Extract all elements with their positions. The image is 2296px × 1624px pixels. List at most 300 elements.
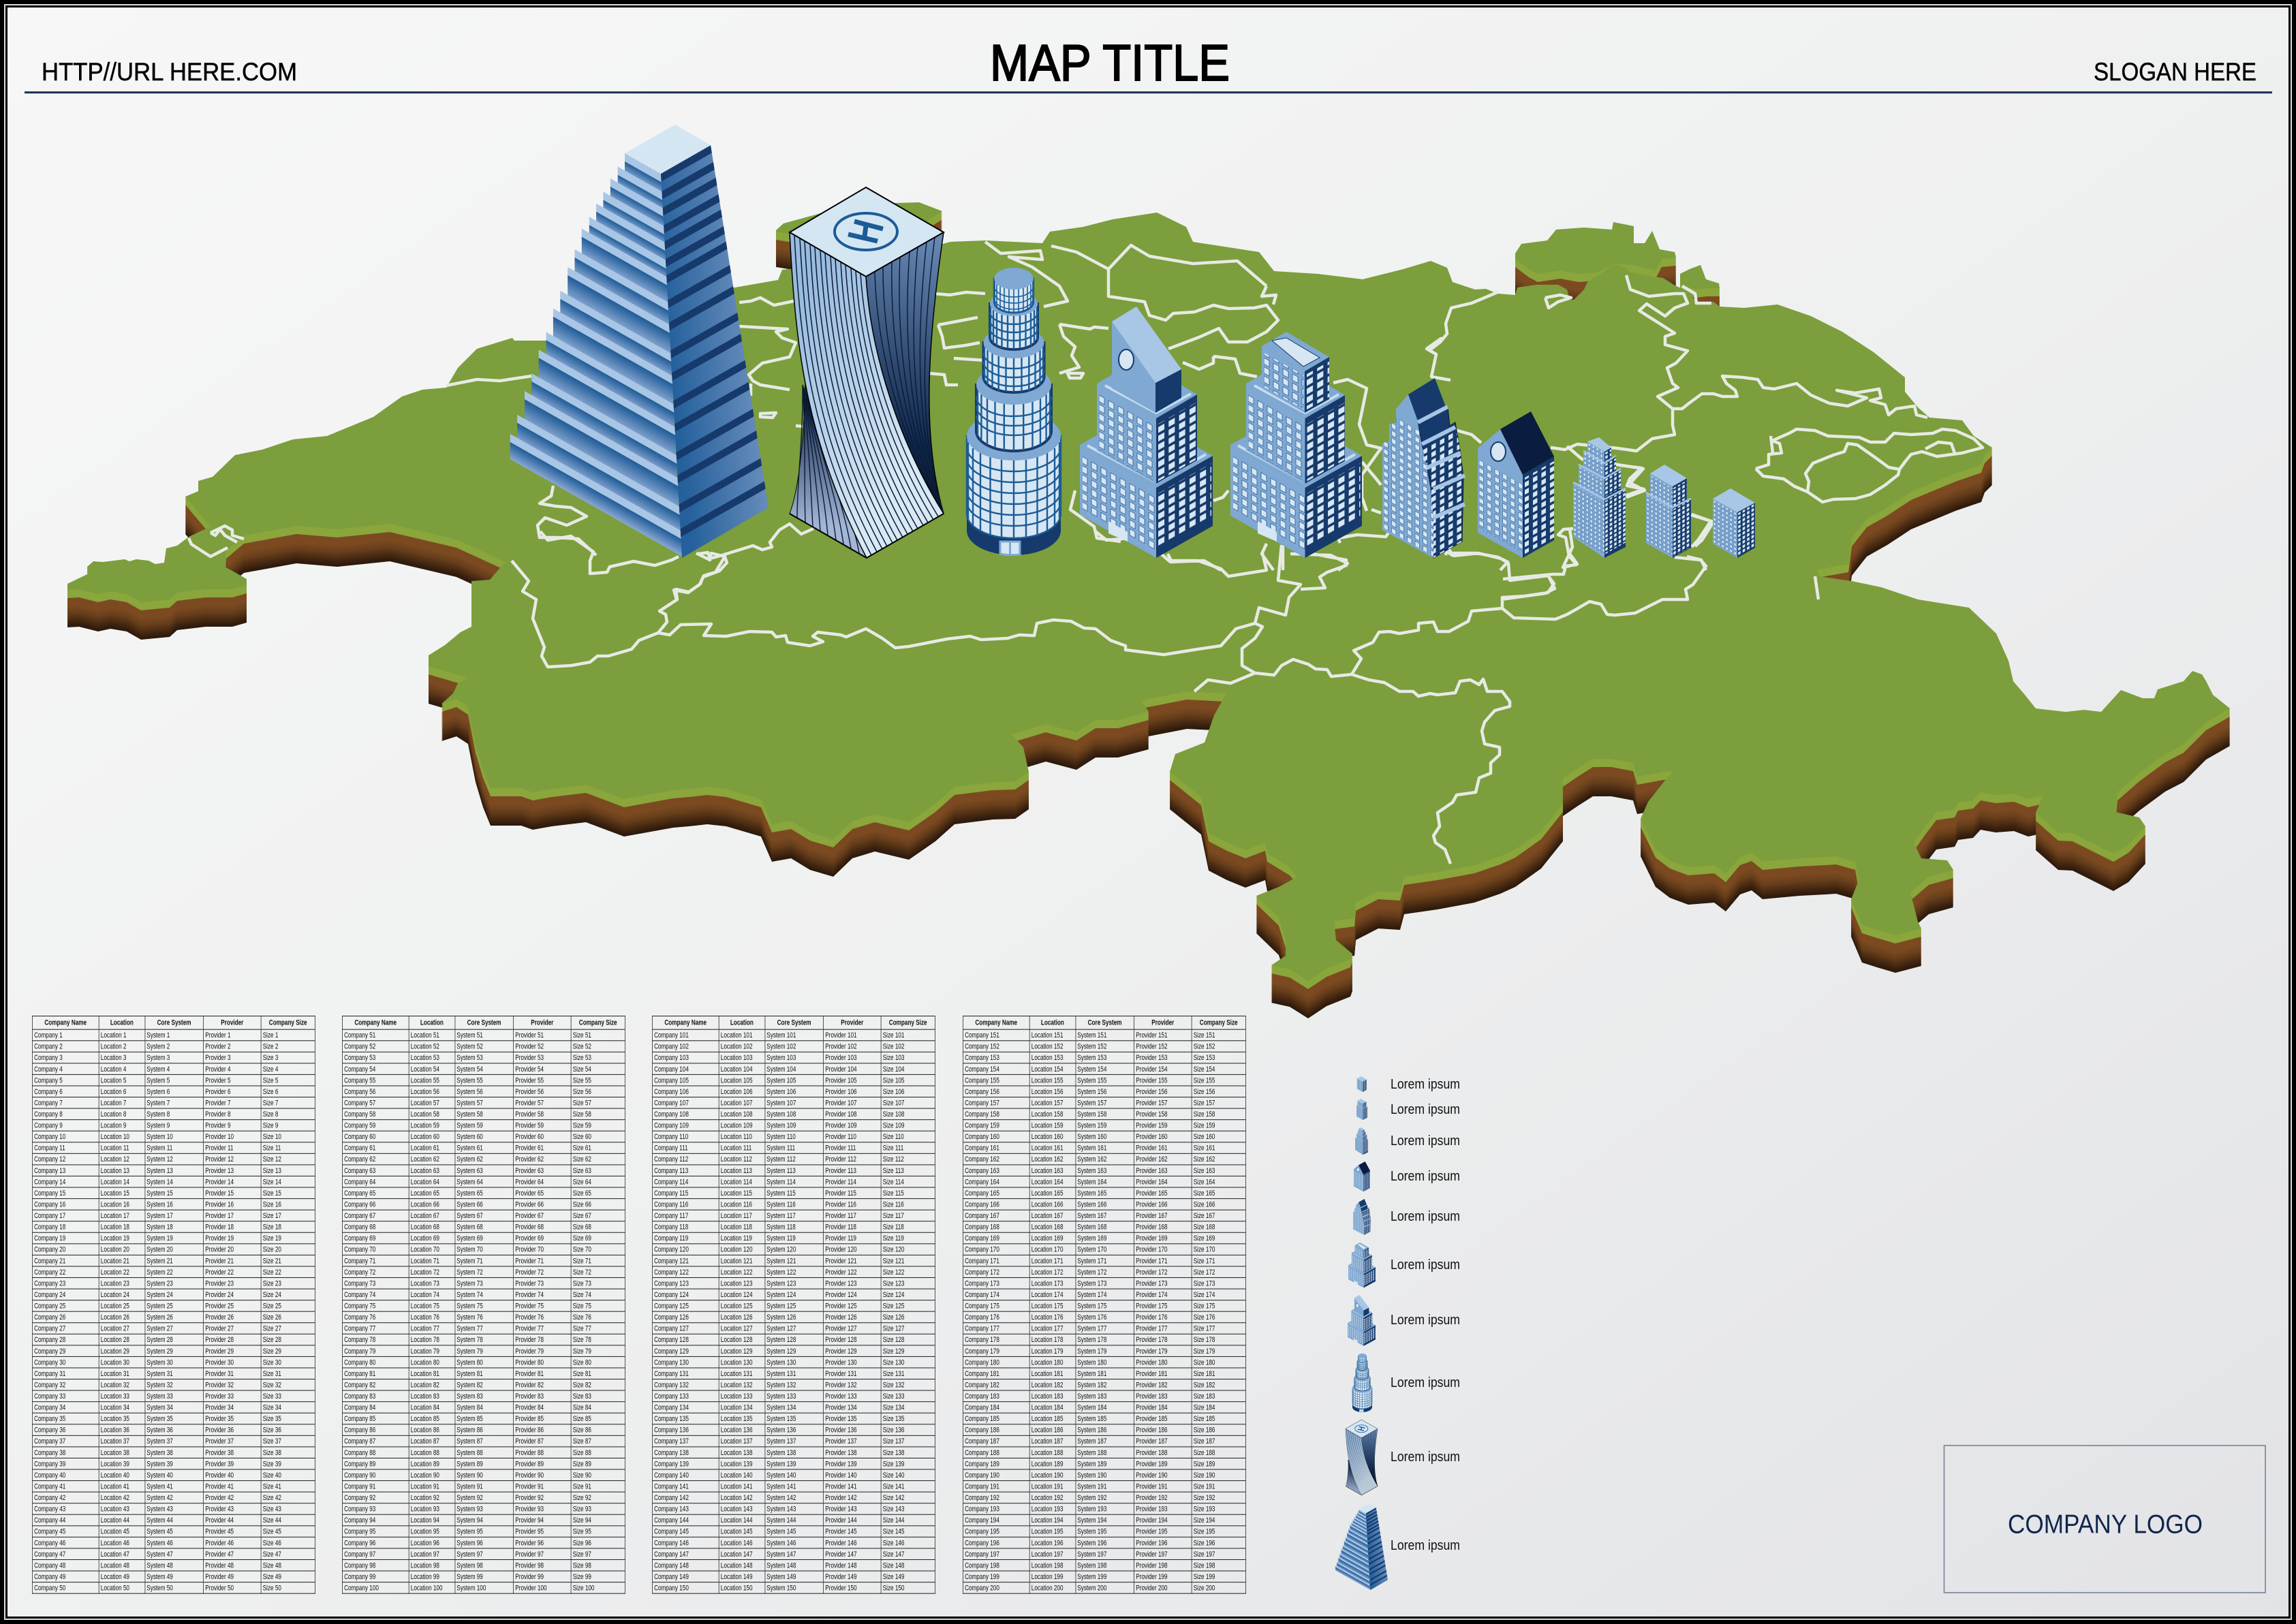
table 3: companies 101-150: Size 104 [883,1065,904,1073]
table 1: companies 1-50: Location 46 [100,1538,129,1547]
table 3: companies 101-150: Provider 140 [825,1471,857,1479]
table 3: companies 101-150: Location 142 [721,1493,753,1501]
region borders [189,242,1983,864]
table 2: companies 51-100: Size 94 [573,1516,591,1524]
table 4: companies 151-200: System 163 [1077,1166,1106,1174]
table 1: companies 1-50: Company 11 [34,1144,65,1152]
table 3: companies 101-150: System 134 [766,1403,796,1411]
table 3: companies 101-150: Provider 111 [825,1144,856,1152]
table 1: companies 1-50: System 7 [146,1098,170,1107]
table 1: companies 1-50: Size 41 [262,1482,281,1490]
table 3: companies 101-150: Size 124 [883,1290,904,1298]
table 4: companies 151-200: Provider 185 [1136,1414,1168,1422]
table 3: companies 101-150: System 107 [766,1098,796,1107]
table 1: companies 1-50: Size 33 [262,1392,281,1400]
table 2: companies 51-100 [342,1016,625,1594]
table 3: companies 101-150: Location 137 [721,1437,753,1446]
table 3: companies 101-150: Provider 145 [825,1527,857,1535]
table 2: companies 51-100: Provider 73 [515,1279,544,1287]
table 1: companies 1-50: Size 29 [262,1347,281,1355]
table 1: companies 1-50: Location 37 [100,1437,129,1446]
table 1: companies 1-50: Provider 27 [205,1324,234,1332]
table 4: companies 151-200: System 173 [1077,1279,1106,1287]
table 2: companies 51-100: Company 88 [344,1448,375,1456]
table 4: companies 151-200: System 157 [1077,1098,1106,1107]
table 2: companies 51-100: System 78 [456,1335,483,1343]
table 4: companies 151-200: Provider 165 [1136,1189,1168,1197]
table 1: companies 1-50: Company 18 [34,1222,65,1231]
table 2: companies 51-100: Size 83 [573,1392,591,1400]
table 1: companies 1-50: System 30 [146,1358,172,1367]
table 4: companies 151-200: Company 172 [965,1268,999,1276]
table 4: companies 151-200: Company 196 [965,1538,999,1547]
table 3: companies 101-150: Company 130 [654,1358,689,1367]
table 3: companies 101-150: Provider 105 [825,1076,857,1084]
table 3: companies 101-150: Provider 139 [825,1459,857,1468]
table 1: companies 1-50: System 37 [146,1437,172,1446]
table 4: companies 151-200: Location 189 [1031,1459,1064,1468]
table 1: companies 1-50: Location 43 [100,1504,129,1513]
table 3: companies 101-150: Provider [841,1018,863,1027]
table 1: companies 1-50: Location 30 [100,1358,129,1367]
table 1: companies 1-50: Size 32 [262,1380,281,1389]
table 2: companies 51-100: System 58 [456,1110,483,1118]
table 3: companies 101-150: Company 128 [654,1335,689,1343]
table 1: companies 1-50: Company 22 [34,1268,65,1276]
table 2: companies 51-100: Size 64 [573,1177,591,1186]
table 4: companies 151-200: Size 191 [1194,1482,1215,1490]
table 3: companies 101-150: Company 121 [654,1256,689,1265]
table 1: companies 1-50: Size 9 [262,1121,278,1129]
table 1: companies 1-50: Provider 6 [205,1087,230,1095]
table 2: companies 51-100: Provider 68 [515,1222,544,1231]
table 4: companies 151-200: Company 194 [965,1516,999,1524]
table 2: companies 51-100: System 54 [456,1065,483,1073]
table 1: companies 1-50: System 25 [146,1301,172,1310]
table 3: companies 101-150: System 102 [766,1042,796,1050]
table 2: companies 51-100: Size 79 [573,1347,591,1355]
table 3: companies 101-150: Provider 117 [825,1211,856,1219]
table 4: companies 151-200: Company 159 [965,1121,999,1129]
table 2: companies 51-100: Provider 55 [515,1076,544,1084]
legend item 9 [1346,1420,1460,1495]
table 3: companies 101-150: Company 132 [654,1380,689,1389]
table 1: companies 1-50: Company 24 [34,1290,65,1298]
table 2: companies 51-100: Size 77 [573,1324,591,1332]
table 2: companies 51-100: System 51 [456,1031,483,1039]
table 4: companies 151-200: Provider 174 [1136,1290,1168,1298]
table 2: companies 51-100: Size 75 [573,1301,591,1310]
table 2: companies 51-100: System 61 [456,1144,483,1152]
table 2: companies 51-100: Company 72 [344,1268,375,1276]
table 2: companies 51-100: System 67 [456,1211,483,1219]
helipad [835,213,897,250]
table 1: companies 1-50: Company 30 [34,1358,65,1367]
table 2: companies 51-100: Location 61 [411,1144,439,1152]
table 2: companies 51-100: System 74 [456,1290,483,1298]
table 2: companies 51-100: System 85 [456,1414,483,1422]
table 1: companies 1-50: Company 36 [34,1426,65,1434]
table 2: companies 51-100: Company 93 [344,1504,375,1513]
table 1: companies 1-50: Location 31 [100,1369,129,1377]
table 1: companies 1-50: Provider 42 [205,1493,234,1501]
table 2: companies 51-100: Company 63 [344,1166,375,1174]
table 3: companies 101-150: Provider 130 [825,1358,857,1367]
table 2: companies 51-100: System 68 [456,1222,483,1231]
table 3: companies 101-150: Provider 142 [825,1493,857,1501]
table 4: companies 151-200: Company 178 [965,1335,999,1343]
table 4: companies 151-200: Size 154 [1194,1065,1215,1073]
table 4: companies 151-200: Location 179 [1031,1347,1064,1355]
table 1: companies 1-50: Company 27 [34,1324,65,1332]
table 1: companies 1-50: System 47 [146,1550,172,1558]
table 4: companies 151-200: Size 152 [1194,1042,1215,1050]
table 1: companies 1-50: Size 21 [262,1256,281,1265]
table 3: companies 101-150: Size 138 [883,1448,904,1456]
table 4: companies 151-200: Company Name [975,1018,1017,1027]
table 3: companies 101-150: System 104 [766,1065,796,1073]
table 3: companies 101-150: Provider 106 [825,1087,857,1095]
table 4: companies 151-200: Provider 181 [1136,1369,1168,1377]
table 3: companies 101-150: Company 134 [654,1403,689,1411]
table 4: companies 151-200: Size 195 [1194,1527,1215,1535]
table 2: companies 51-100: Provider [531,1018,553,1027]
table 2: companies 51-100: Provider 87 [515,1437,544,1446]
table 3: companies 101-150: Size 106 [883,1087,904,1095]
legend item 1: Lorem ipsum [1391,1077,1460,1092]
table 1: companies 1-50: Provider 11 [205,1144,233,1152]
table 1: companies 1-50: Location 11 [100,1144,129,1152]
table 2: companies 51-100: Size 55 [573,1076,591,1084]
table 3: companies 101-150: Size 130 [883,1358,904,1367]
table 3: companies 101-150: Location 149 [721,1572,753,1580]
table 3: companies 101-150: Location 129 [721,1347,753,1355]
table 2: companies 51-100: Location 88 [411,1448,439,1456]
table 3: companies 101-150: System 119 [766,1234,796,1242]
table 3: companies 101-150: Size 101 [883,1031,904,1039]
table 1: companies 1-50: Provider 34 [205,1403,234,1411]
table 4: companies 151-200: Company 179 [965,1347,999,1355]
table 4: companies 151-200: Location 194 [1031,1516,1064,1524]
table 1: companies 1-50: Location 13 [100,1166,129,1174]
table 4: companies 151-200: Provider 186 [1136,1426,1168,1434]
table 4: companies 151-200: Location 200 [1031,1583,1064,1592]
table 4: companies 151-200: Location 199 [1031,1572,1064,1580]
table 2: companies 51-100: System 73 [456,1279,483,1287]
table 4: companies 151-200: Location 176 [1031,1313,1064,1321]
table 4: companies 151-200: Location 185 [1031,1414,1064,1422]
table 3: companies 101-150: Location 122 [721,1268,753,1276]
table 4: companies 151-200: Provider 170 [1136,1245,1168,1253]
table 3: companies 101-150: System 122 [766,1268,796,1276]
table 2: companies 51-100: Company 84 [344,1403,375,1411]
table 2: companies 51-100: Company 78 [344,1335,375,1343]
table 2: companies 51-100: Location 81 [411,1369,439,1377]
table 4: companies 151-200: Size 161 [1194,1144,1215,1152]
table 2: companies 51-100: System 71 [456,1256,483,1265]
table 1: companies 1-50: Size 48 [262,1561,281,1570]
table 4: companies 151-200: Size 164 [1194,1177,1215,1186]
table 3: companies 101-150: Size 118 [883,1222,904,1231]
table 4: companies 151-200: System 182 [1077,1380,1106,1389]
table 2: companies 51-100: Company 92 [344,1493,375,1501]
table 2: companies 51-100: Location 59 [411,1121,439,1129]
table 4: companies 151-200: Size 177 [1194,1324,1215,1332]
table 4: companies 151-200: System 159 [1077,1121,1106,1129]
table 1: companies 1-50: Location 12 [100,1155,129,1164]
table 2: companies 51-100: Company 73 [344,1279,375,1287]
table 4: companies 151-200: Location 182 [1031,1380,1064,1389]
legend item 3: Lorem ipsum [1391,1134,1460,1149]
table 2: companies 51-100: System 83 [456,1392,483,1400]
table 2: companies 51-100: Size 100 [573,1583,594,1592]
table 3: companies 101-150: Company 145 [654,1527,689,1535]
table 4: companies 151-200: System 167 [1077,1211,1106,1219]
table 1: companies 1-50: Location 26 [100,1313,129,1321]
legend item 10 [1335,1499,1460,1590]
table 2: companies 51-100: Size 76 [573,1313,591,1321]
table 1: companies 1-50: System 44 [146,1516,172,1524]
table 2: companies 51-100: Location 58 [411,1110,439,1118]
table 2: companies 51-100: Location 89 [411,1459,439,1468]
table 1: companies 1-50: Size 34 [262,1403,281,1411]
table 2: companies 51-100: Provider 53 [515,1053,544,1061]
table 1: companies 1-50: System 17 [146,1211,172,1219]
table 4: companies 151-200: Size 155 [1194,1076,1215,1084]
table 2: companies 51-100: Company 61 [344,1144,375,1152]
table 3: companies 101-150: Size 145 [883,1527,904,1535]
table 3: companies 101-150: System 110 [766,1132,796,1140]
table 1: companies 1-50: Provider 3 [205,1053,230,1061]
table 3: companies 101-150: System 117 [766,1211,796,1219]
table 2: companies 51-100: System 57 [456,1098,483,1107]
table 1: companies 1-50: System 42 [146,1493,172,1501]
table 1: companies 1-50: Company 3 [34,1053,62,1061]
table 4: companies 151-200: Location 192 [1031,1493,1064,1501]
table 4: companies 151-200: Location 157 [1031,1098,1064,1107]
table 1: companies 1-50: Size 36 [262,1426,281,1434]
legend [1335,1076,1460,1590]
legend item 6 [1348,1243,1460,1287]
table 3: companies 101-150: Company 129 [654,1347,689,1355]
table 1: companies 1-50: Location 38 [100,1448,129,1456]
table 3: companies 101-150: Provider 123 [825,1279,857,1287]
table 1: companies 1-50: Company 38 [34,1448,65,1456]
table 4: companies 151-200: Company 155 [965,1076,999,1084]
table 2: companies 51-100: Company 94 [344,1516,375,1524]
table 4: companies 151-200: Size 188 [1194,1448,1215,1456]
table 3: companies 101-150: System 136 [766,1426,796,1434]
table 3: companies 101-150: Location 106 [721,1087,753,1095]
table 4: companies 151-200: Company 193 [965,1504,999,1513]
table 2: companies 51-100: System 82 [456,1380,483,1389]
table 3: companies 101-150: Company 111 [654,1144,688,1152]
table 3: companies 101-150 [652,1016,935,1594]
table 1: companies 1-50: Provider 45 [205,1527,234,1535]
table 1: companies 1-50: Company 26 [34,1313,65,1321]
table 4: companies 151-200: System 197 [1077,1550,1106,1558]
table 1: companies 1-50: Location 34 [100,1403,129,1411]
table 3: companies 101-150: Provider 109 [825,1121,857,1129]
table 2: companies 51-100: Provider 80 [515,1358,544,1367]
table 2: companies 51-100: Location 93 [411,1504,439,1513]
table 4: companies 151-200: System 154 [1077,1065,1106,1073]
building 2: twisted tower with helipad [790,187,944,558]
table 1: companies 1-50: Size 20 [262,1245,281,1253]
table 2: companies 51-100: Company 82 [344,1380,375,1389]
table 4: companies 151-200: Provider 169 [1136,1234,1168,1242]
table 4: companies 151-200: System 169 [1077,1234,1106,1242]
table 1: companies 1-50: Provider 12 [205,1155,234,1164]
table 4: companies 151-200: Company 169 [965,1234,999,1242]
table 4: companies 151-200: Location 166 [1031,1200,1064,1208]
table 3: companies 101-150: Size 112 [883,1155,904,1164]
table 3: companies 101-150: Company 135 [654,1414,689,1422]
table 1: companies 1-50: Size 10 [262,1132,281,1140]
table 1: companies 1-50: Location 39 [100,1459,129,1468]
table 3: companies 101-150: Location 130 [721,1358,753,1367]
table 4: companies 151-200: Core System [1088,1018,1122,1027]
table 4: companies 151-200: Location 197 [1031,1550,1064,1558]
table 3: companies 101-150: Company 140 [654,1471,689,1479]
table 4: companies 151-200: Size 185 [1194,1414,1215,1422]
table 2: companies 51-100: System 56 [456,1087,483,1095]
table 4: companies 151-200: Location 173 [1031,1279,1064,1287]
table 2: companies 51-100: Company 67 [344,1211,375,1219]
table 1: companies 1-50: Company 37 [34,1437,65,1446]
table 3: companies 101-150: System 123 [766,1279,796,1287]
table 1: companies 1-50: Location 49 [100,1572,129,1580]
table 1: companies 1-50: Provider 20 [205,1245,234,1253]
table 4: companies 151-200: System 196 [1077,1538,1106,1547]
table 1: companies 1-50: Size 19 [262,1234,281,1242]
table 1: companies 1-50: Provider 48 [205,1561,234,1570]
table 1: companies 1-50: System 22 [146,1268,172,1276]
table 3: companies 101-150: Location 101 [721,1031,753,1039]
table 1: companies 1-50: Size 23 [262,1279,281,1287]
table 1: companies 1-50: Size 12 [262,1155,281,1164]
table 2: companies 51-100: Company 54 [344,1065,375,1073]
table 1: companies 1-50: Location 44 [100,1516,129,1524]
table 2: companies 51-100: Provider 98 [515,1561,544,1570]
table 3: companies 101-150: Provider 141 [825,1482,857,1490]
table 2: companies 51-100: Company 99 [344,1572,375,1580]
table 3: companies 101-150: Size 109 [883,1121,904,1129]
table 3: companies 101-150: Size 134 [883,1403,904,1411]
table 2: companies 51-100: Size 93 [573,1504,591,1513]
table 2: companies 51-100: System 62 [456,1155,483,1164]
table 3: companies 101-150: Location 147 [721,1550,753,1558]
table 4: companies 151-200: Location 155 [1031,1076,1064,1084]
table 1: companies 1-50: System 45 [146,1527,172,1535]
table 1: companies 1-50: Provider 35 [205,1414,234,1422]
table 3: companies 101-150: Size 132 [883,1380,904,1389]
table 1: companies 1-50: Size 18 [262,1222,281,1231]
table 1: companies 1-50: Location 23 [100,1279,129,1287]
table 1: companies 1-50: System 20 [146,1245,172,1253]
table 4: companies 151-200: Size 194 [1194,1516,1215,1524]
table 3: companies 101-150: Company 149 [654,1572,689,1580]
table 2: companies 51-100: Location 75 [411,1301,439,1310]
table 4: companies 151-200: Size 172 [1194,1268,1215,1276]
table 1: companies 1-50: Company 8 [34,1110,62,1118]
table 2: companies 51-100: Location 69 [411,1234,439,1242]
table 3: companies 101-150: Company 113 [654,1166,688,1174]
table 1: companies 1-50: Provider 17 [205,1211,234,1219]
table 1: companies 1-50: Company 46 [34,1538,65,1547]
table 4: companies 151-200: Size 175 [1194,1301,1215,1310]
table 1: companies 1-50: Provider 43 [205,1504,234,1513]
table 4: companies 151-200: Size 184 [1194,1403,1215,1411]
table 1: companies 1-50: Provider 23 [205,1279,234,1287]
table 4: companies 151-200: Company 157 [965,1098,999,1107]
table 2: companies 51-100: Size 87 [573,1437,591,1446]
table 1: companies 1-50: Provider 50 [205,1583,234,1592]
table 1: companies 1-50: Location 10 [100,1132,129,1140]
table 2: companies 51-100: Provider 77 [515,1324,544,1332]
table 3: companies 101-150: Provider 144 [825,1516,857,1524]
table 2: companies 51-100: Provider 64 [515,1177,544,1186]
table 2: companies 51-100: Size 67 [573,1211,591,1219]
table 2: companies 51-100: Size 52 [573,1042,591,1050]
company logo box [1944,1446,2265,1593]
table 2: companies 51-100: System 92 [456,1493,483,1501]
table 4: companies 151-200: System 153 [1077,1053,1106,1061]
table 4: companies 151-200: Location 190 [1031,1471,1064,1479]
table 3: companies 101-150: System 112 [766,1155,796,1164]
table 2: companies 51-100: Location 53 [411,1053,439,1061]
company logo box: COMPANY LOGO [2008,1510,2203,1540]
table 1: companies 1-50: System 16 [146,1200,172,1208]
table 2: companies 51-100: Company 69 [344,1234,375,1242]
table 3: companies 101-150: Company 139 [654,1459,689,1468]
table 4: companies 151-200: Company 170 [965,1245,999,1253]
table 1: companies 1-50: System 33 [146,1392,172,1400]
table 1: companies 1-50: Provider 10 [205,1132,234,1140]
table 4: companies 151-200: Location 193 [1031,1504,1064,1513]
table 3: companies 101-150: System 141 [766,1482,796,1490]
table 1: companies 1-50: Size 30 [262,1358,281,1367]
table 2: companies 51-100: Provider 88 [515,1448,544,1456]
table 3: companies 101-150: System 128 [766,1335,796,1343]
table 2: companies 51-100: Location 66 [411,1200,439,1208]
table 1: companies 1-50: Location 29 [100,1347,129,1355]
table 2: companies 51-100: Size 95 [573,1527,591,1535]
table 3: companies 101-150: System 121 [766,1256,796,1265]
table 4: companies 151-200: Size 171 [1194,1256,1215,1265]
table 4: companies 151-200: Provider 167 [1136,1211,1168,1219]
table 4: companies 151-200: Provider 199 [1136,1572,1168,1580]
table 1: companies 1-50: Location 4 [100,1065,126,1073]
table 2: companies 51-100: System 70 [456,1245,483,1253]
table 4: companies 151-200: System 168 [1077,1222,1106,1231]
table 3: companies 101-150: Size 116 [883,1200,904,1208]
table 2: companies 51-100: Provider 76 [515,1313,544,1321]
table 2: companies 51-100: Company 95 [344,1527,375,1535]
table 1: companies 1-50: Provider 47 [205,1550,234,1558]
table 2: companies 51-100: System 63 [456,1166,483,1174]
table 4: companies 151-200: System 194 [1077,1516,1106,1524]
table 4: companies 151-200: Provider 176 [1136,1313,1168,1321]
table 1: companies 1-50: Location 41 [100,1482,129,1490]
table 3: companies 101-150: Location 108 [721,1110,753,1118]
table 4: companies 151-200: System 166 [1077,1200,1106,1208]
table 1: companies 1-50: Location 27 [100,1324,129,1332]
table 1: companies 1-50: Size 14 [262,1177,281,1186]
table 4: companies 151-200: Provider 151 [1136,1031,1168,1039]
table 3: companies 101-150: Company 120 [654,1245,689,1253]
table 3: companies 101-150: Location 124 [721,1290,753,1298]
